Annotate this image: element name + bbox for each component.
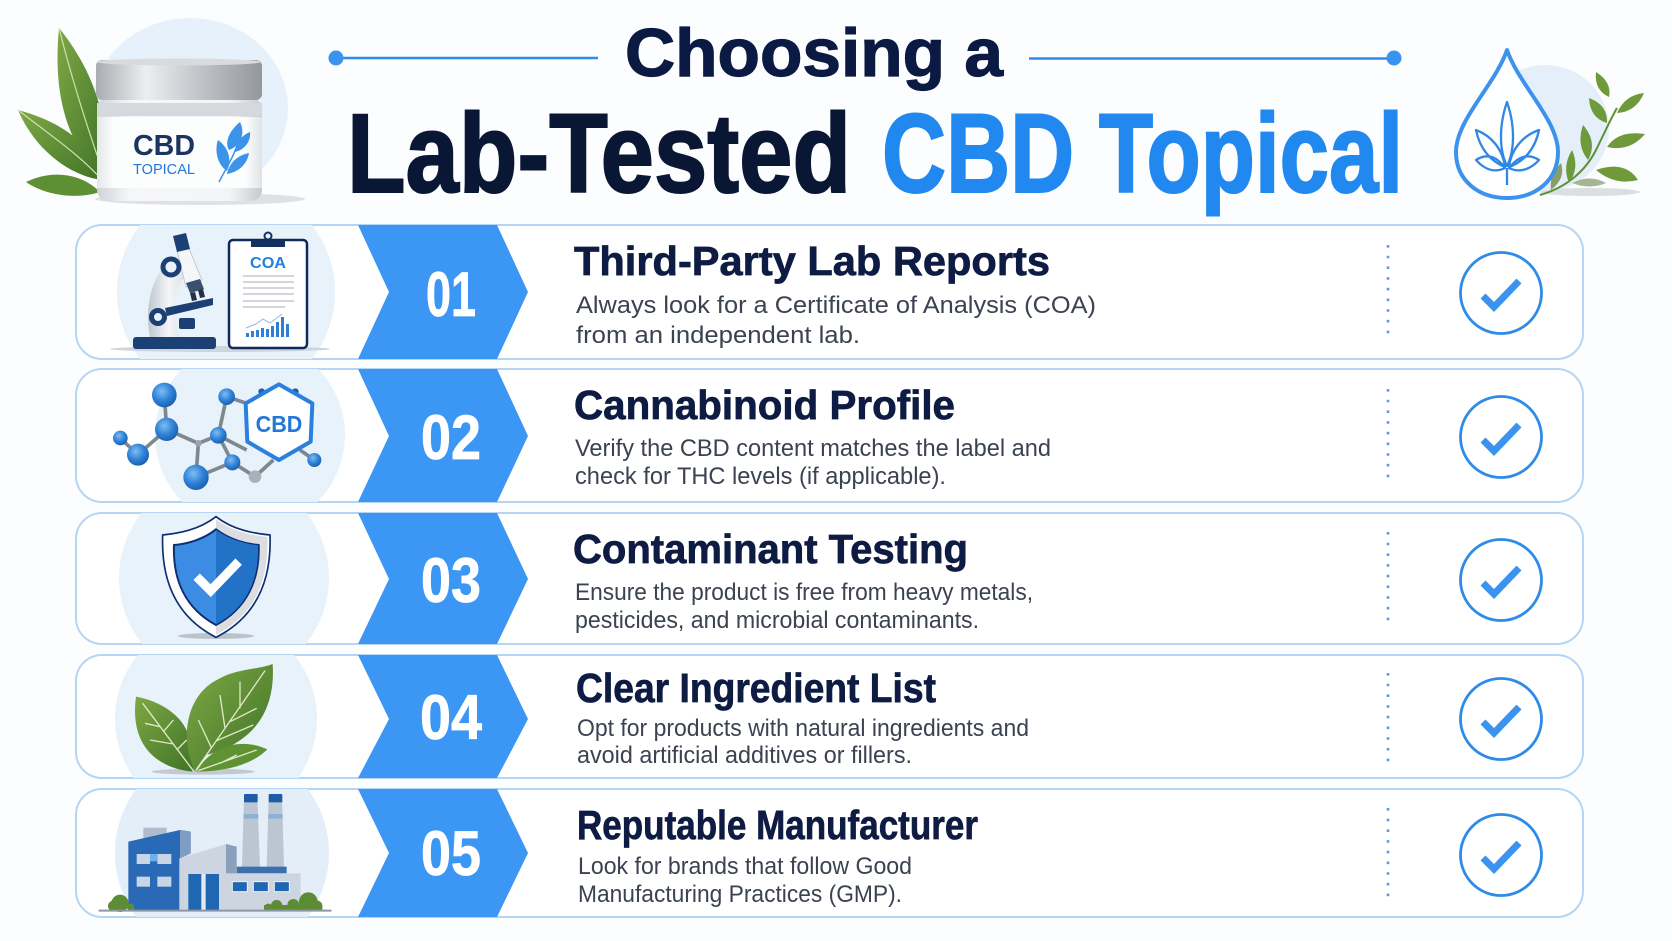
heading and description bbox=[576, 665, 1029, 769]
row 02: Cannabinoid Profile bbox=[75, 368, 1584, 503]
icon: green leaves bbox=[115, 655, 317, 778]
row 03: Contaminant Testing bbox=[75, 512, 1584, 645]
heading and description: avoid artificial additives or fillers. bbox=[577, 742, 912, 769]
heading and description: Ensure the product is free from heavy metals, bbox=[575, 579, 1033, 606]
dotted divider and check badge bbox=[1388, 532, 1542, 625]
heading and description bbox=[574, 382, 1051, 490]
heading and description: check for THC levels (if applicable). bbox=[575, 463, 946, 490]
icon: droplet with cannabis leaf and branch bbox=[1456, 50, 1645, 198]
number chevron 05 bbox=[358, 789, 528, 917]
heading and description: Contaminant Testing bbox=[573, 526, 968, 572]
heading and description: Look for brands that follow Good bbox=[578, 853, 912, 880]
card outline bbox=[76, 513, 1583, 644]
heading and description bbox=[574, 238, 1096, 349]
card outline bbox=[76, 369, 1583, 502]
icon: CBD molecule bbox=[113, 369, 345, 502]
number chevron 03: 03 bbox=[421, 546, 481, 616]
number chevron 04 bbox=[358, 655, 528, 778]
number chevron 01 bbox=[358, 225, 528, 359]
title line: Choosing a: Choosing a bbox=[625, 15, 1004, 91]
row 01: Third-Party Lab Reports bbox=[75, 224, 1584, 360]
heading and description: Reputable Manufacturer bbox=[577, 802, 978, 848]
card outline bbox=[76, 789, 1583, 917]
dotted divider and check badge bbox=[1388, 245, 1542, 340]
card outline bbox=[76, 225, 1583, 359]
number chevron 03 bbox=[358, 513, 528, 644]
dotted divider and check badge bbox=[1388, 808, 1542, 898]
title line: Choosing a bbox=[328, 15, 1402, 91]
row 05: Reputable Manufacturer bbox=[75, 788, 1584, 918]
number chevron 02: 02 bbox=[421, 403, 481, 473]
title line: Lab-Tested CBD Topical bbox=[347, 91, 1403, 216]
heading and description: Manufacturing Practices (GMP). bbox=[578, 881, 902, 908]
hexagon label CBD: CBD bbox=[256, 411, 302, 437]
heading and description: Opt for products with natural ingredients and bbox=[577, 715, 1029, 742]
icon: CBD topical jar with leaves bbox=[18, 18, 305, 205]
title line: Lab-Tested CBD Topical: CBD Topical bbox=[882, 91, 1403, 216]
number chevron 05: 05 bbox=[421, 819, 481, 889]
title line: Lab-Tested CBD Topical: Lab-Tested bbox=[347, 91, 851, 216]
icon: factory bbox=[98, 789, 332, 917]
jar label: TOPICAL: TOPICAL bbox=[133, 161, 195, 178]
heading and description: Clear Ingredient List bbox=[576, 665, 936, 711]
number chevron 04: 04 bbox=[420, 683, 482, 753]
heading and description: from an independent lab. bbox=[576, 322, 860, 349]
heading and description bbox=[573, 526, 1033, 634]
number chevron 01: 01 bbox=[426, 260, 476, 330]
icon: microscope and COA clipboard bbox=[110, 225, 335, 359]
row 04: Clear Ingredient List bbox=[75, 654, 1584, 779]
dotted divider and check badge bbox=[1388, 673, 1542, 762]
heading and description: Always look for a Certificate of Analysis (COA) bbox=[576, 292, 1096, 319]
jar label: CBD: CBD bbox=[133, 130, 195, 162]
heading and description: Cannabinoid Profile bbox=[574, 382, 955, 428]
dotted divider and check badge bbox=[1388, 389, 1542, 484]
number chevron 02 bbox=[358, 369, 528, 502]
heading and description: Third-Party Lab Reports bbox=[574, 238, 1050, 284]
heading and description: pesticides, and microbial contaminants. bbox=[575, 607, 979, 634]
heading and description: Verify the CBD content matches the label and bbox=[575, 435, 1051, 462]
icon: shield with check bbox=[119, 513, 329, 644]
clipboard label: COA bbox=[250, 255, 286, 272]
heading and description bbox=[577, 802, 978, 908]
jar blue leaf mark bbox=[216, 122, 250, 182]
card outline bbox=[76, 655, 1583, 778]
